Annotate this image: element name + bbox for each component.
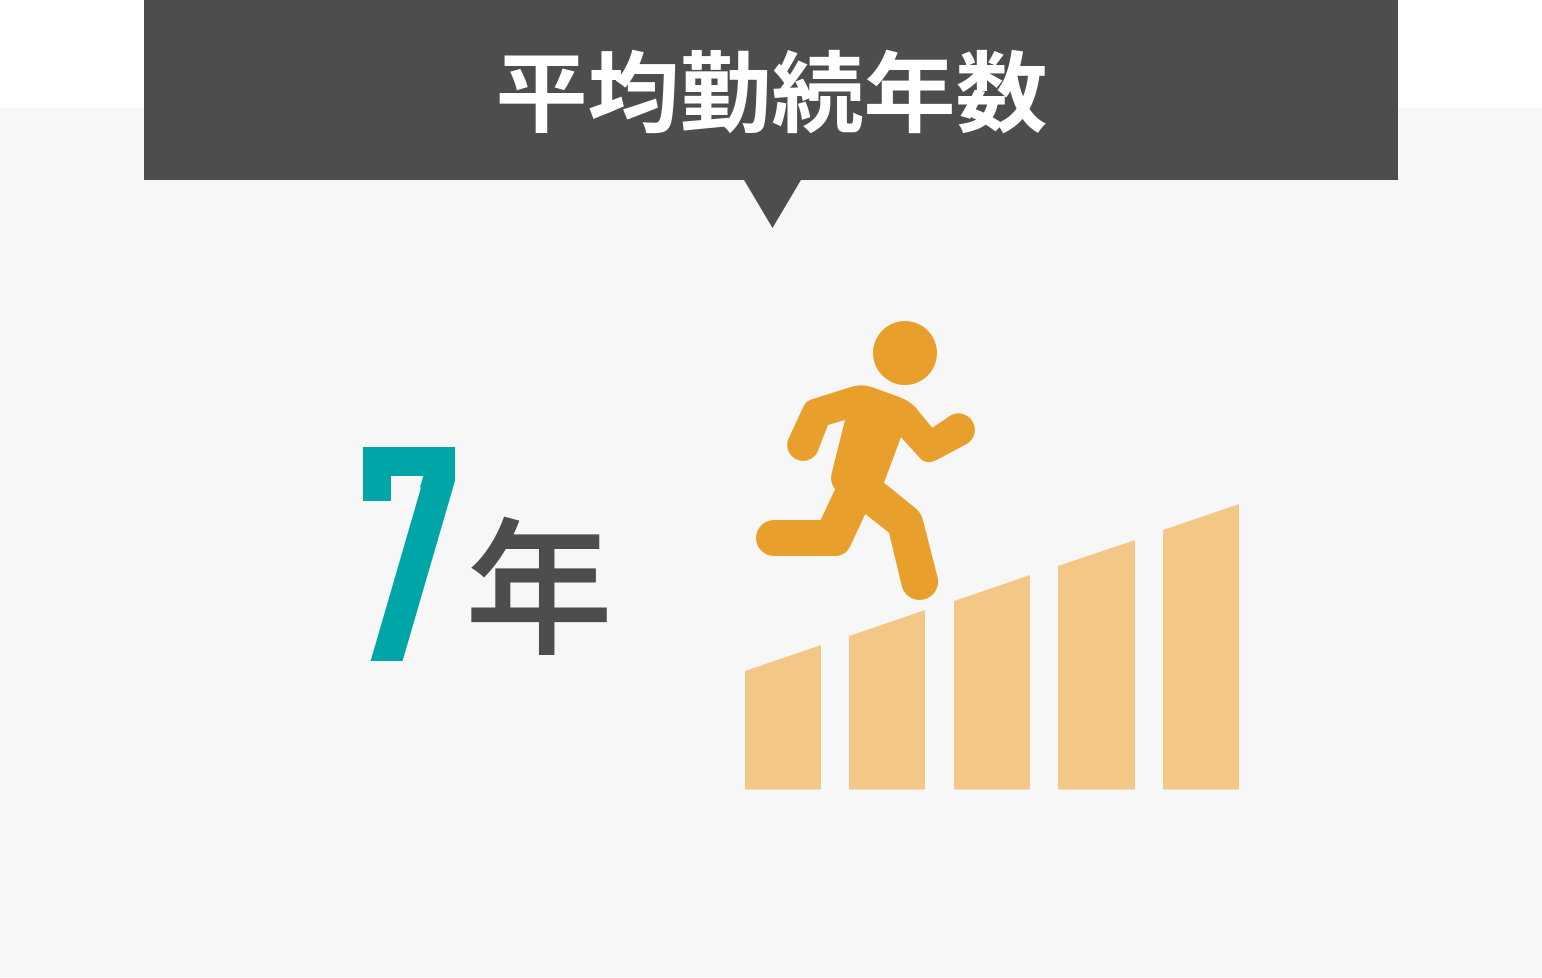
- icon: rising stairs: [745, 504, 1239, 790]
- unit: year: 年: [465, 510, 613, 674]
- numeral 7: 7: [343, 390, 472, 732]
- title: 平均勤続年数: [496, 45, 1048, 144]
- title banner: [144, 0, 1398, 228]
- value: 7 years: [363, 447, 607, 661]
- numeral 7: [363, 447, 455, 661]
- icon: running person: [756, 321, 975, 600]
